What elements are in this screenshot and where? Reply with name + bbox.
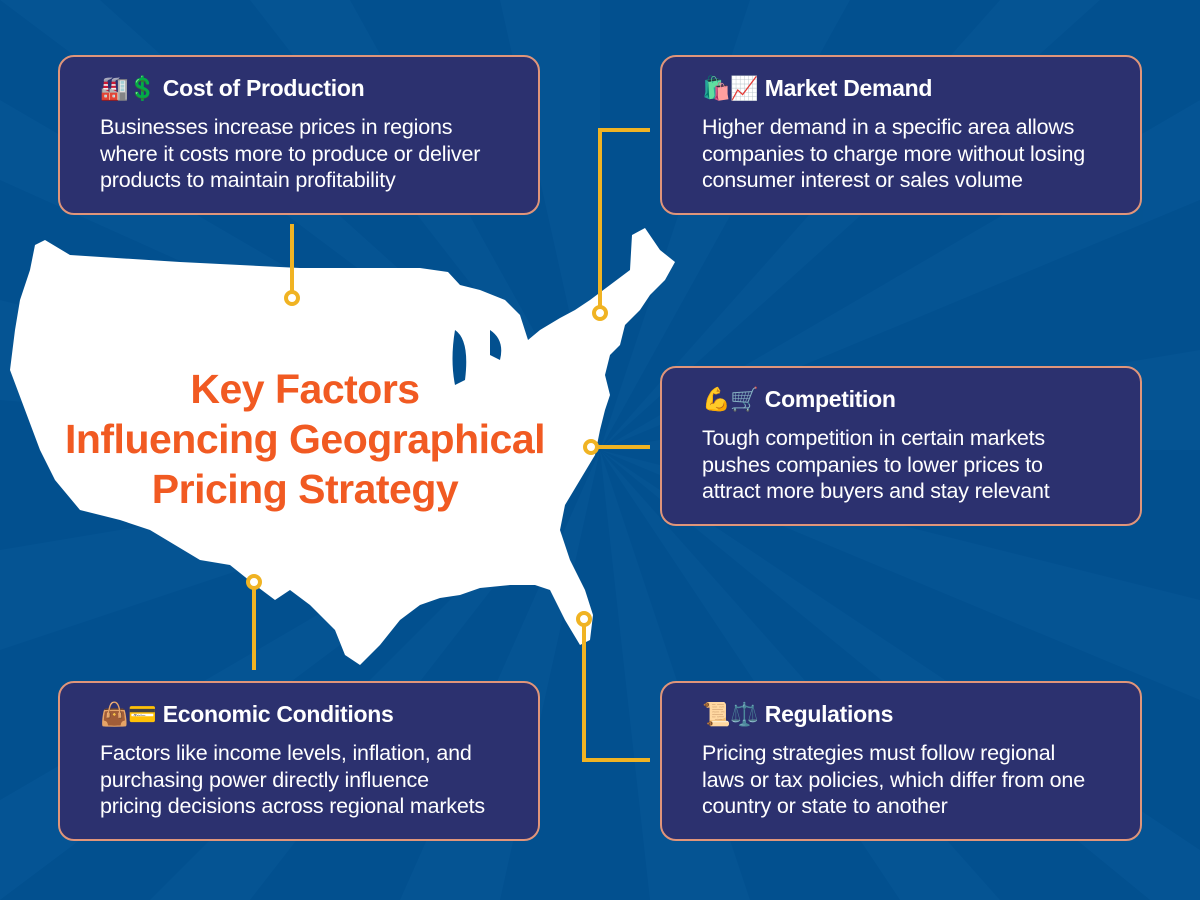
- panel: regulations: country or state to another: [702, 794, 948, 818]
- panel: market demand: companies to charge more without losing: [702, 142, 1085, 166]
- panel: cost of production: products to maintain profitability: [100, 168, 396, 192]
- panel: economic conditions: 👜💳 Economic Conditions: [100, 701, 393, 727]
- panel: economic conditions: Factors like income levels, inflation, and: [100, 741, 472, 765]
- panel: regulations: Pricing strategies must follow regional: [702, 741, 1055, 765]
- connectors: [248, 130, 650, 760]
- panel: market demand: consumer interest or sales volume: [702, 168, 1023, 192]
- panel: market demand: [660, 55, 1142, 215]
- panel: market demand: Higher demand in a specific area allows: [702, 115, 1074, 139]
- panel: competition: 💪🛒 Competition: [702, 386, 896, 412]
- panel: economic conditions: purchasing power directly influence: [100, 768, 429, 792]
- panel: cost of production: [58, 55, 540, 215]
- panel: economic conditions: pricing decisions across regional markets: [100, 794, 485, 818]
- panel: cost of production: 🏭💲 Cost of Production: [100, 75, 364, 101]
- panel: regulations: 📜⚖️ Regulations: [702, 701, 893, 727]
- title: Influencing Geographical: [65, 416, 545, 462]
- panel: cost of production: Businesses increase prices in regions: [100, 115, 452, 139]
- panel: competition: attract more buyers and stay relevant: [702, 479, 1050, 503]
- panel: regulations: [660, 681, 1142, 841]
- title: Pricing Strategy: [152, 466, 458, 512]
- panel: competition: Tough competition in certain markets: [702, 426, 1045, 450]
- panel: regulations: laws or tax policies, which differ from one: [702, 768, 1085, 792]
- panel: cost of production: where it costs more to produce or deliver: [100, 142, 480, 166]
- map: USA: [10, 228, 675, 665]
- panel: competition: pushes companies to lower prices to: [702, 452, 1043, 476]
- title: Key Factors: [190, 366, 420, 412]
- panel: market demand: 🛍️📈 Market Demand: [702, 75, 932, 101]
- panel: economic conditions: [58, 681, 540, 841]
- panel: competition: [660, 366, 1142, 526]
- title: [65, 366, 545, 512]
